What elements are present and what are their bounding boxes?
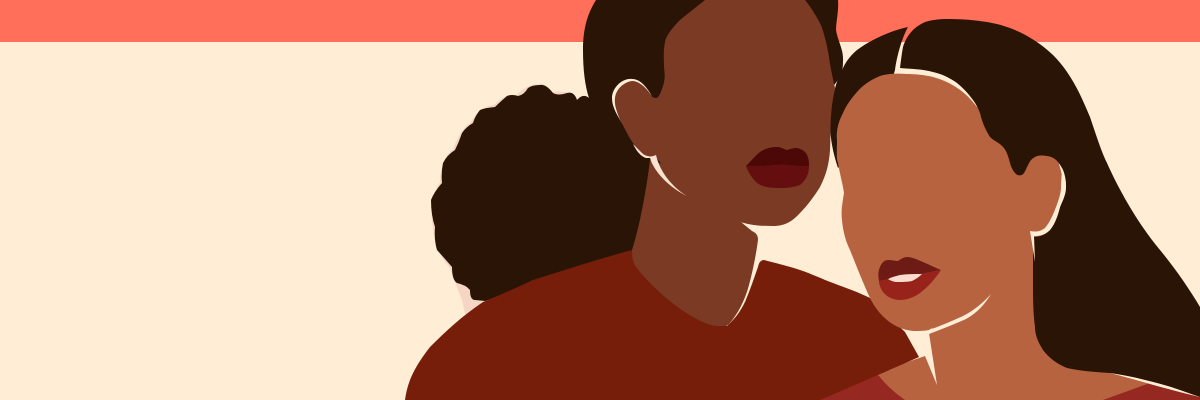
woman two: ear outline	[1030, 168, 1066, 262]
coral top band	[0, 0, 1200, 42]
shirt on right shoulder	[1103, 383, 1200, 400]
lower lip	[746, 165, 809, 188]
woman one: shirt	[405, 250, 919, 400]
woman one: ear outline	[612, 79, 652, 124]
woman one: ear lobe and jaw line	[633, 144, 687, 196]
woman one: hair behind right of face	[800, 0, 843, 110]
blush halo behind curly hair	[432, 84, 640, 318]
woman two: hair to shirt sliver	[1110, 373, 1200, 397]
woman one: hair and curly bun	[431, 0, 720, 301]
woman two: back hair tuft	[830, 27, 908, 168]
woman one: face	[613, 0, 835, 226]
lower lip	[879, 270, 941, 300]
teeth	[888, 274, 922, 282]
woman two: face	[837, 74, 1066, 331]
woman two: shirt	[810, 370, 1200, 400]
woman two: jaw line	[929, 294, 991, 334]
woman one: neck	[632, 160, 758, 326]
woman two: main hair	[900, 19, 1200, 397]
woman one: lips	[746, 147, 809, 188]
woman two: lips	[878, 257, 941, 300]
woman two: neck and shoulder	[870, 200, 1200, 400]
